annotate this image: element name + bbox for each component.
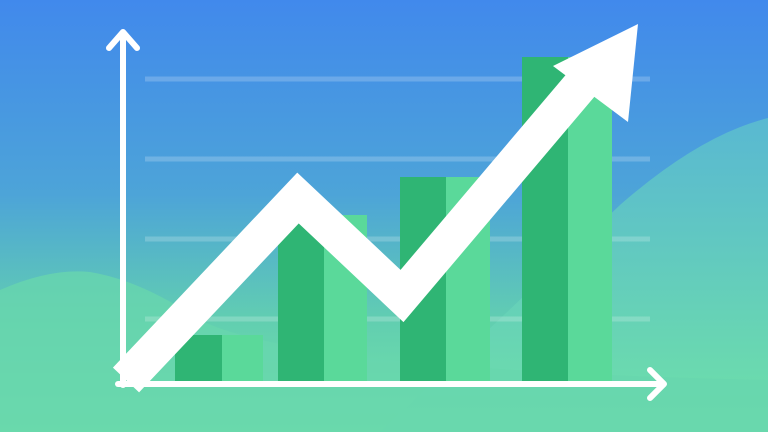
- bar 3: [400, 177, 490, 385]
- axes: [109, 32, 664, 398]
- trend arrow: [126, 24, 638, 380]
- bar 4: [522, 57, 612, 385]
- bar 1: [175, 335, 263, 385]
- hill: left: [0, 271, 768, 432]
- bar 2: [278, 215, 367, 385]
- gridlines: [145, 79, 650, 319]
- hill: right: [380, 118, 768, 432]
